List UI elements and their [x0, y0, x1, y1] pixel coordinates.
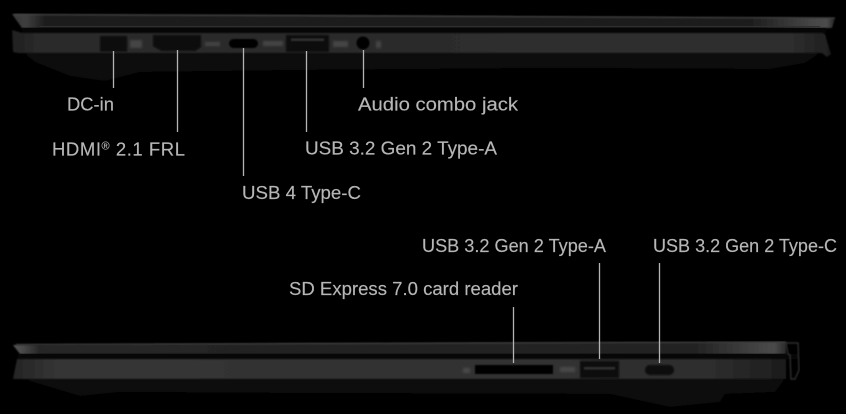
- lid top highlight: [14, 14, 835, 18]
- laptop hinge gap: [18, 354, 798, 359]
- label: Audio combo jack: Audio combo jack: [358, 94, 519, 114]
- port: USB-C: [645, 365, 674, 375]
- port: USB-A: [286, 35, 329, 52]
- right hinge bracket: [786, 343, 799, 379]
- lid top highlight: [16, 342, 786, 344]
- port: SD card reader: [475, 365, 553, 374]
- lid lower edge highlight: [40, 26, 820, 28]
- USB-A tongue: [291, 38, 324, 41]
- leader lines: [114, 48, 660, 363]
- label: HDMI 2.1 FRL: ®: [102, 140, 110, 152]
- laptop lid: [12, 14, 835, 28]
- laptop body underside shadow: [22, 379, 785, 407]
- label: USB 3.2 Gen 2 Type-A bottom: USB 3.2 Gen 2 Type-A: [422, 235, 607, 256]
- label: USB 4 Type-C: USB 4 Type-C: [242, 182, 361, 203]
- label: SD Express 7.0 card reader: SD Express 7.0 card reader: [289, 278, 518, 299]
- laptop: bottom side view: [13, 342, 799, 407]
- port: USB-A: [580, 361, 619, 378]
- laptop lid: [13, 342, 786, 354]
- laptop body underside shadow: [24, 53, 820, 81]
- label: USB 3.2 Gen 2 Type-A top: USB 3.2 Gen 2 Type-A: [305, 138, 498, 158]
- label: DC-in: DC-in: [67, 94, 114, 114]
- laptop base: [12, 30, 831, 57]
- port: audio jack: [356, 36, 370, 50]
- label: HDMI 2.1 FRL: 2.1 FRL: [110, 138, 185, 160]
- laptop hinge gap: [22, 28, 826, 33]
- port: USB-C: [229, 39, 258, 48]
- port symbols: [463, 367, 575, 373]
- port: DC-in: [100, 36, 127, 52]
- USB-A tongue: [584, 367, 615, 370]
- label: USB 3.2 Gen 2 Type-C: USB 3.2 Gen 2 Type-C: [653, 235, 837, 256]
- label: HDMI 2.1 FRL: HDMI: [52, 138, 101, 160]
- port symbols: [130, 40, 381, 48]
- laptop: top side view: [12, 14, 835, 81]
- laptop base: [13, 359, 786, 379]
- port: HDMI: [153, 35, 201, 51]
